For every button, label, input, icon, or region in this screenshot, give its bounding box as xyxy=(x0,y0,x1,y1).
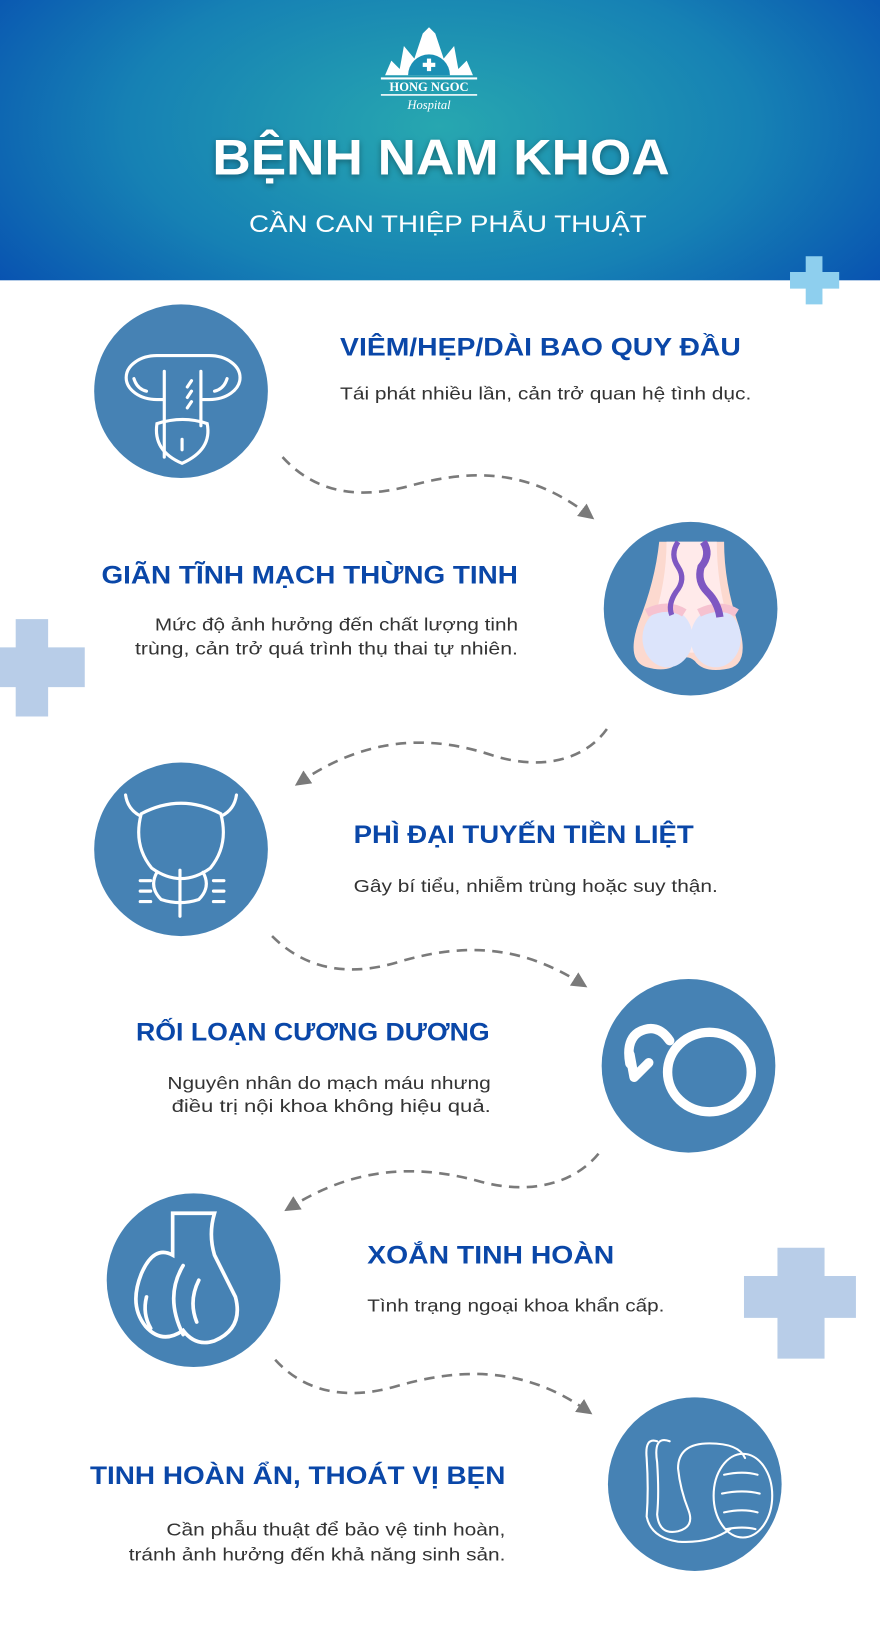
icon: penis xyxy=(94,304,268,478)
desc 4: Nguyên nhân do mạch máu nhưng xyxy=(167,1073,491,1093)
logo xyxy=(381,27,477,112)
icon: testicular torsion xyxy=(107,1193,280,1367)
item 4 xyxy=(136,979,775,1153)
icon: erectile dysfunction xyxy=(602,979,775,1153)
desc 3: Gây bí tiểu, nhiễm trùng hoặc suy thận. xyxy=(354,875,718,896)
desc 2: Mức độ ảnh hưởng đến chất lượng tinh xyxy=(155,615,518,635)
item 2 xyxy=(101,522,777,696)
desc 6: Cần phẫu thuật để bảo vệ tinh hoàn, xyxy=(166,1518,505,1539)
logo: Hospital xyxy=(406,98,451,112)
dashed arrows xyxy=(272,457,607,1410)
desc 1: Tái phát nhiều lần, cản trở quan hệ tình dục. xyxy=(340,384,751,404)
heading 1: VIÊM/HẸP/DÀI BAO QUY ĐẦU xyxy=(340,332,741,362)
title: BỆNH NAM KHOA xyxy=(212,130,670,186)
desc 2: trùng, cản trở quá trình thụ thai tự nhiên. xyxy=(135,639,518,659)
icon: prostate xyxy=(94,762,268,936)
item 3 xyxy=(94,762,718,936)
logo: HONG NGOC xyxy=(389,80,469,94)
desc 5: Tình trạng ngoại khoa khẩn cấp. xyxy=(367,1296,664,1316)
decorative plus right xyxy=(744,1248,856,1359)
item 1 xyxy=(94,304,751,478)
heading 2: GIÃN TĨNH MẠCH THỪNG TINH xyxy=(101,560,518,590)
item 6 xyxy=(90,1397,782,1571)
header banner xyxy=(0,0,880,280)
heading 5: XOẮN TINH HOÀN xyxy=(367,1239,614,1269)
desc 6: tránh ảnh hưởng đến khả năng sinh sản. xyxy=(129,1545,505,1565)
heading 6: TINH HOÀN ẨN, THOÁT VỊ BẸN xyxy=(90,1461,505,1490)
heading 4: RỐI LOẠN CƯƠNG DƯƠNG xyxy=(136,1017,490,1047)
subtitle: CẦN CAN THIỆP PHẪU THUẬT xyxy=(249,209,647,238)
heading 3: PHÌ ĐẠI TUYẾN TIỀN LIỆT xyxy=(354,819,694,849)
item 5 xyxy=(107,1193,664,1367)
icon: varicocele xyxy=(604,522,777,696)
desc 4: điều trị nội khoa không hiệu quả. xyxy=(172,1096,491,1116)
icon: undescended testis / hernia xyxy=(608,1397,782,1571)
decorative plus left xyxy=(0,619,85,716)
decorative plus top right xyxy=(790,256,839,304)
